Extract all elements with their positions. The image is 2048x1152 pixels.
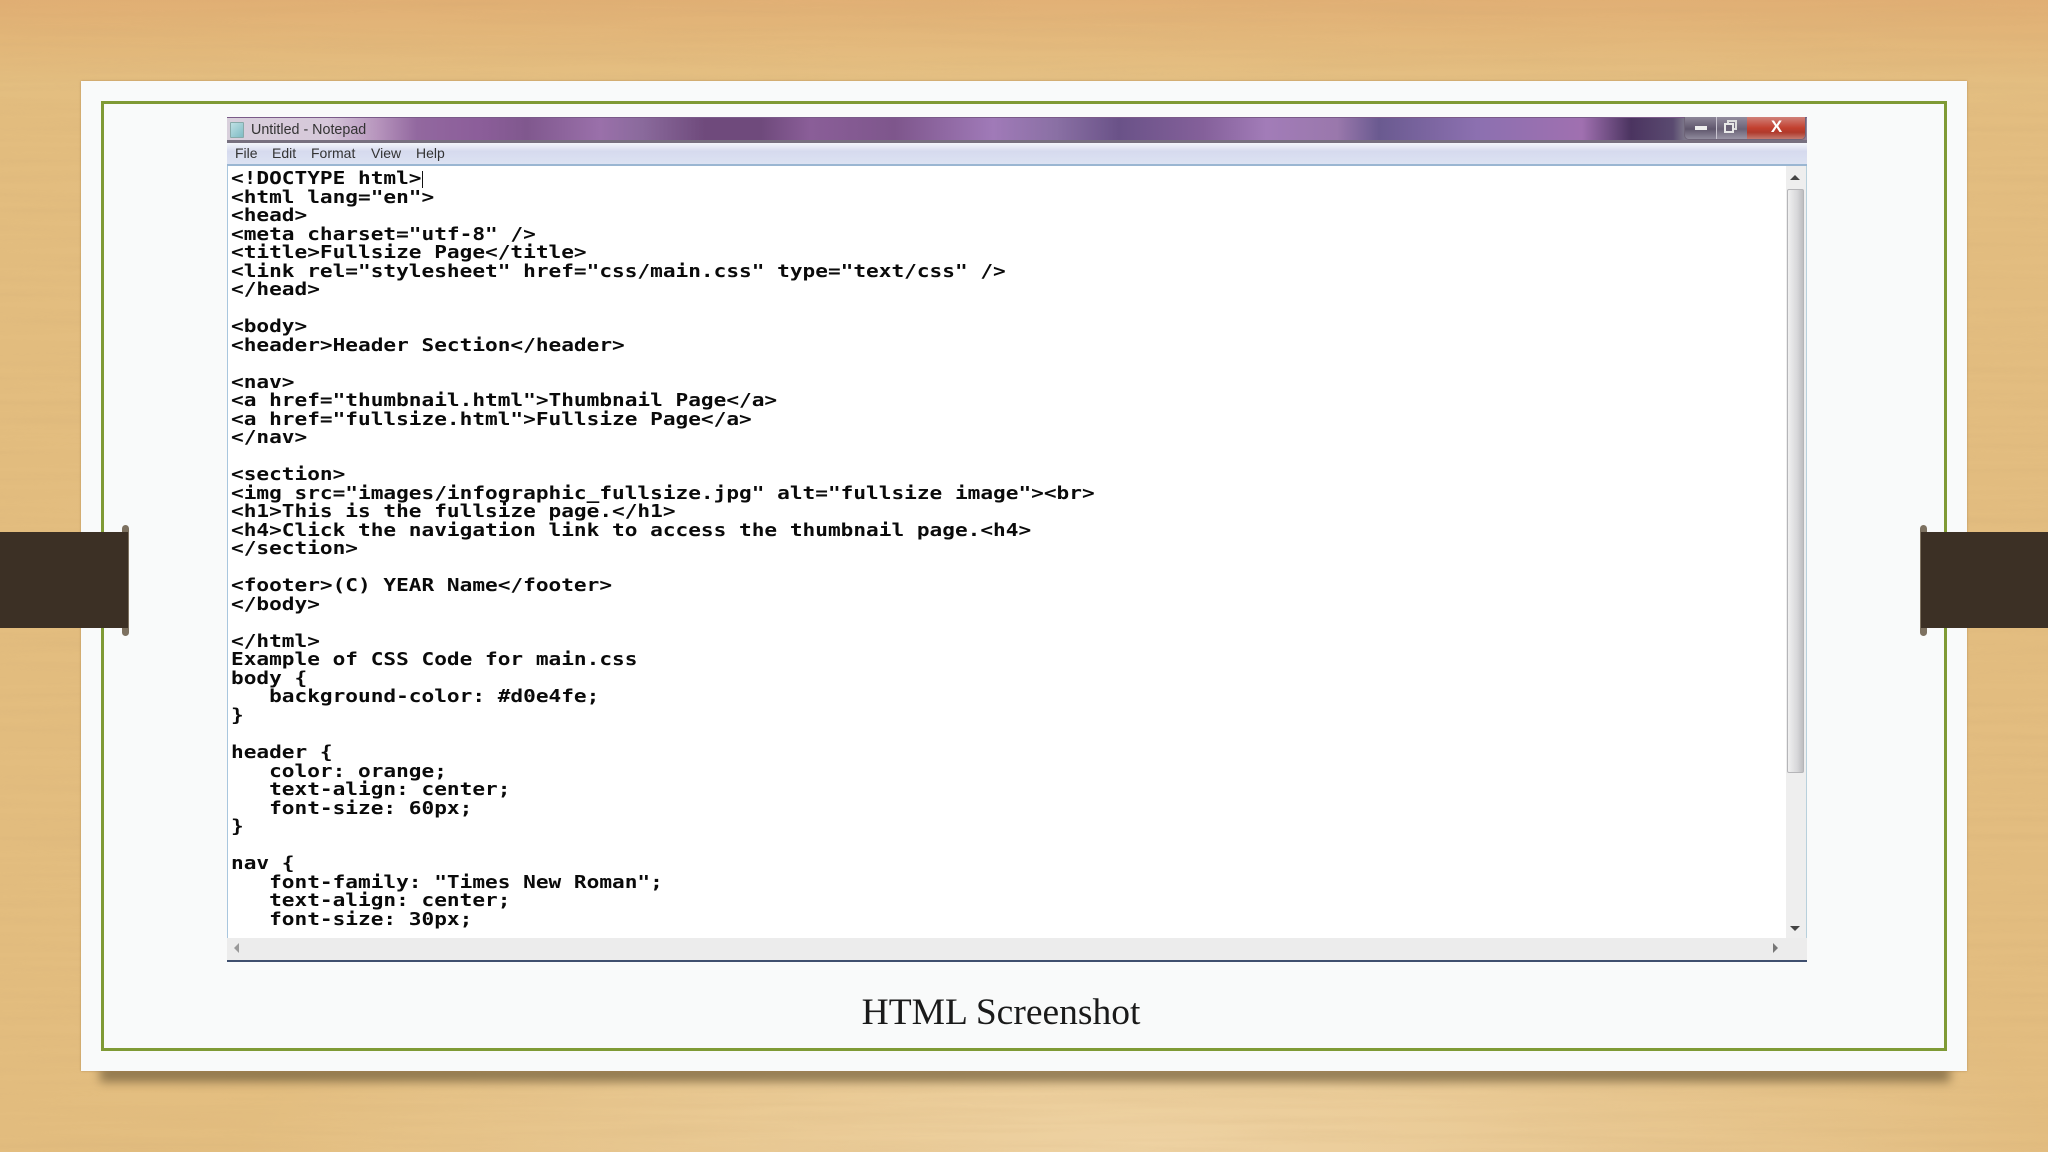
menu: File: File [235,145,258,161]
window title: Untitled - Notepad [251,122,366,138]
green frame [101,101,1947,1051]
minimize button [1685,117,1717,139]
left strap [0,525,129,636]
menu: Format: Format [311,145,355,161]
caption: HTML Screenshot [862,992,1140,1033]
card shadow [100,1066,1950,1082]
scroll right arrow [1773,943,1778,953]
horizontal scrollbar [227,938,1807,962]
scroll left arrow [234,943,239,953]
text area left edge [227,166,228,938]
window controls [1684,117,1806,140]
left strap nub [122,525,129,636]
menu: Edit: Edit [272,145,296,161]
right strap nub [1920,525,1927,636]
close button: X [1771,117,1782,136]
menu bar [227,143,1807,166]
menu: View: View [371,145,401,161]
close button [1747,117,1806,139]
notepad window [227,117,1807,962]
notepad icon [230,122,244,138]
right strap band [1921,532,2048,628]
scroll up arrow [1790,175,1800,180]
code text: <!DOCTYPE html> <html lang="en"> <head> <meta charset="utf-8" /> <title>Fullsize Page</title> <link rel="stylesheet" href="css/main.css" type="text/css" /> </head> <body> <header>Header Section</header> <nav> <a href="thumbnail.html">Thumbnail Page</a> <a href="fullsize.html">Fullsize Page</a> </nav> <section> <img src="images/infographic_fullsize.jpg" alt="fullsize image"><br> <h1>This is the fullsize page.</h1> <h4>Click the navigation link to access the thumbnail page.<h4> </section> <footer>(C) YEAR Name</footer> </body> </html> Example of CSS Code for main.css body { background-color: #d0e4fe; } header { color: orange; text-align: center; font-size: 60px; } nav { font-family: "Times New Roman"; text-align: center; font-size: 30px; [231,168,1095,930]
scroll thumb [1787,189,1804,773]
vertical scrollbar [1786,166,1807,938]
scroll down arrow [1790,926,1800,931]
menu: Help: Help [416,145,445,161]
left strap band [0,532,128,628]
slide card [81,81,1967,1071]
right strap [1920,525,2048,636]
restore button [1717,117,1747,139]
text cursor [422,171,423,188]
title bar [227,117,1807,143]
